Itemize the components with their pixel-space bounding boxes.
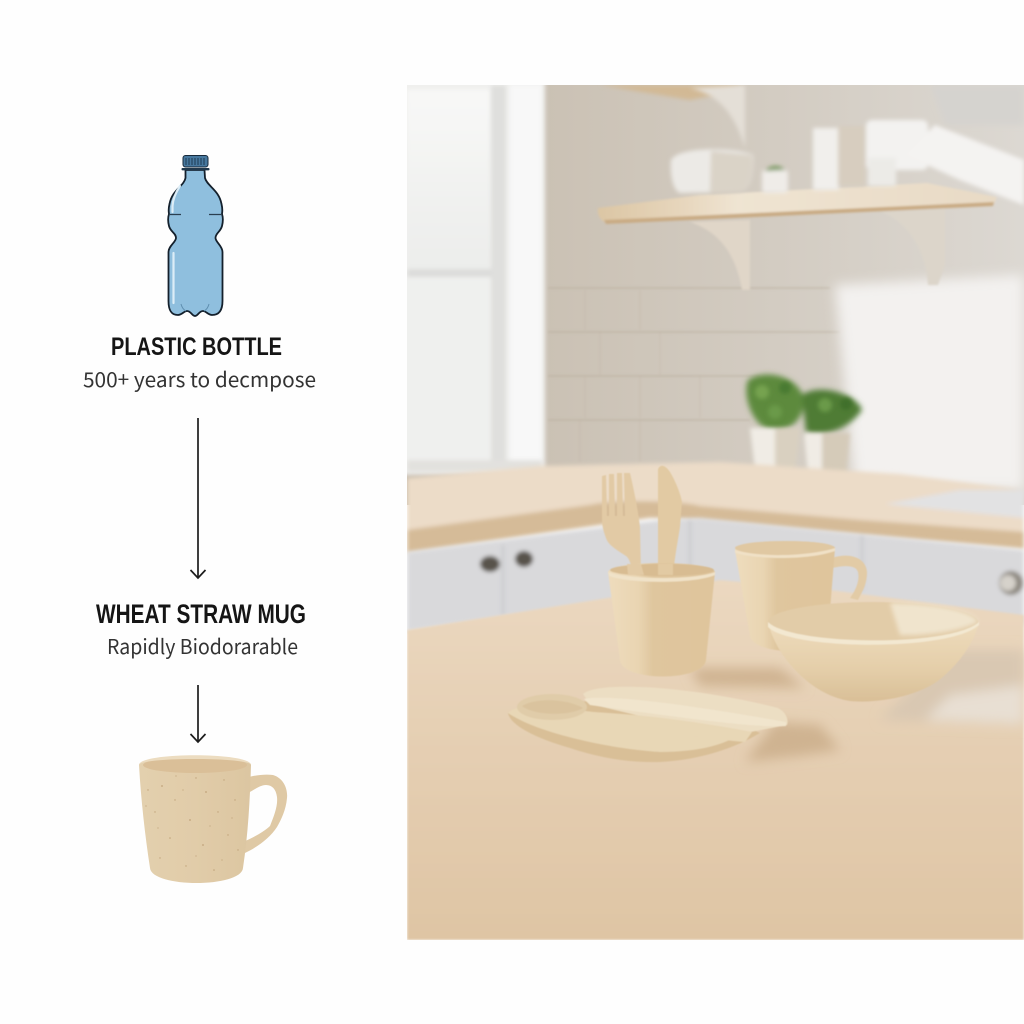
- lower cabinets: [407, 518, 1024, 632]
- mug on table: [735, 541, 867, 651]
- upper shelf fragment: [600, 85, 745, 100]
- potted herbs: [746, 374, 862, 475]
- kitchen countertop: [407, 462, 1024, 553]
- photo: kitchen table with wheat straw tableware: [400, 80, 1024, 940]
- table sun patches and shadows: [690, 650, 1024, 762]
- wall tiles: [579, 287, 838, 421]
- kitchen wall: [407, 85, 1024, 505]
- wooden shelf: [598, 183, 997, 290]
- arrow: label to mug: [190, 685, 206, 742]
- fork: [602, 473, 641, 575]
- right upper cabinet: [930, 85, 1024, 125]
- shelf objects: [671, 120, 1024, 205]
- icon: plastic bottle: [168, 156, 223, 316]
- wooden table: [407, 580, 1024, 940]
- heading: plastic bottle: PLASTIC BOTTLE: [111, 333, 282, 361]
- text: decomposition time: 500+ years to decmpose: [83, 363, 316, 393]
- cup with cutlery: [608, 563, 715, 676]
- window: [400, 80, 545, 475]
- heading: wheat straw mug: WHEAT STRAW MUG: [96, 599, 306, 629]
- text: biodegradable: Rapidly Biodorarable: [107, 630, 298, 660]
- icon: wheat straw mug: [139, 755, 287, 883]
- plate with spoon and knife: [508, 687, 788, 762]
- bowl: [768, 602, 979, 702]
- arrow: bottle to mug label: [190, 418, 206, 578]
- knife: [658, 466, 682, 575]
- light patch on wall: [835, 275, 1024, 490]
